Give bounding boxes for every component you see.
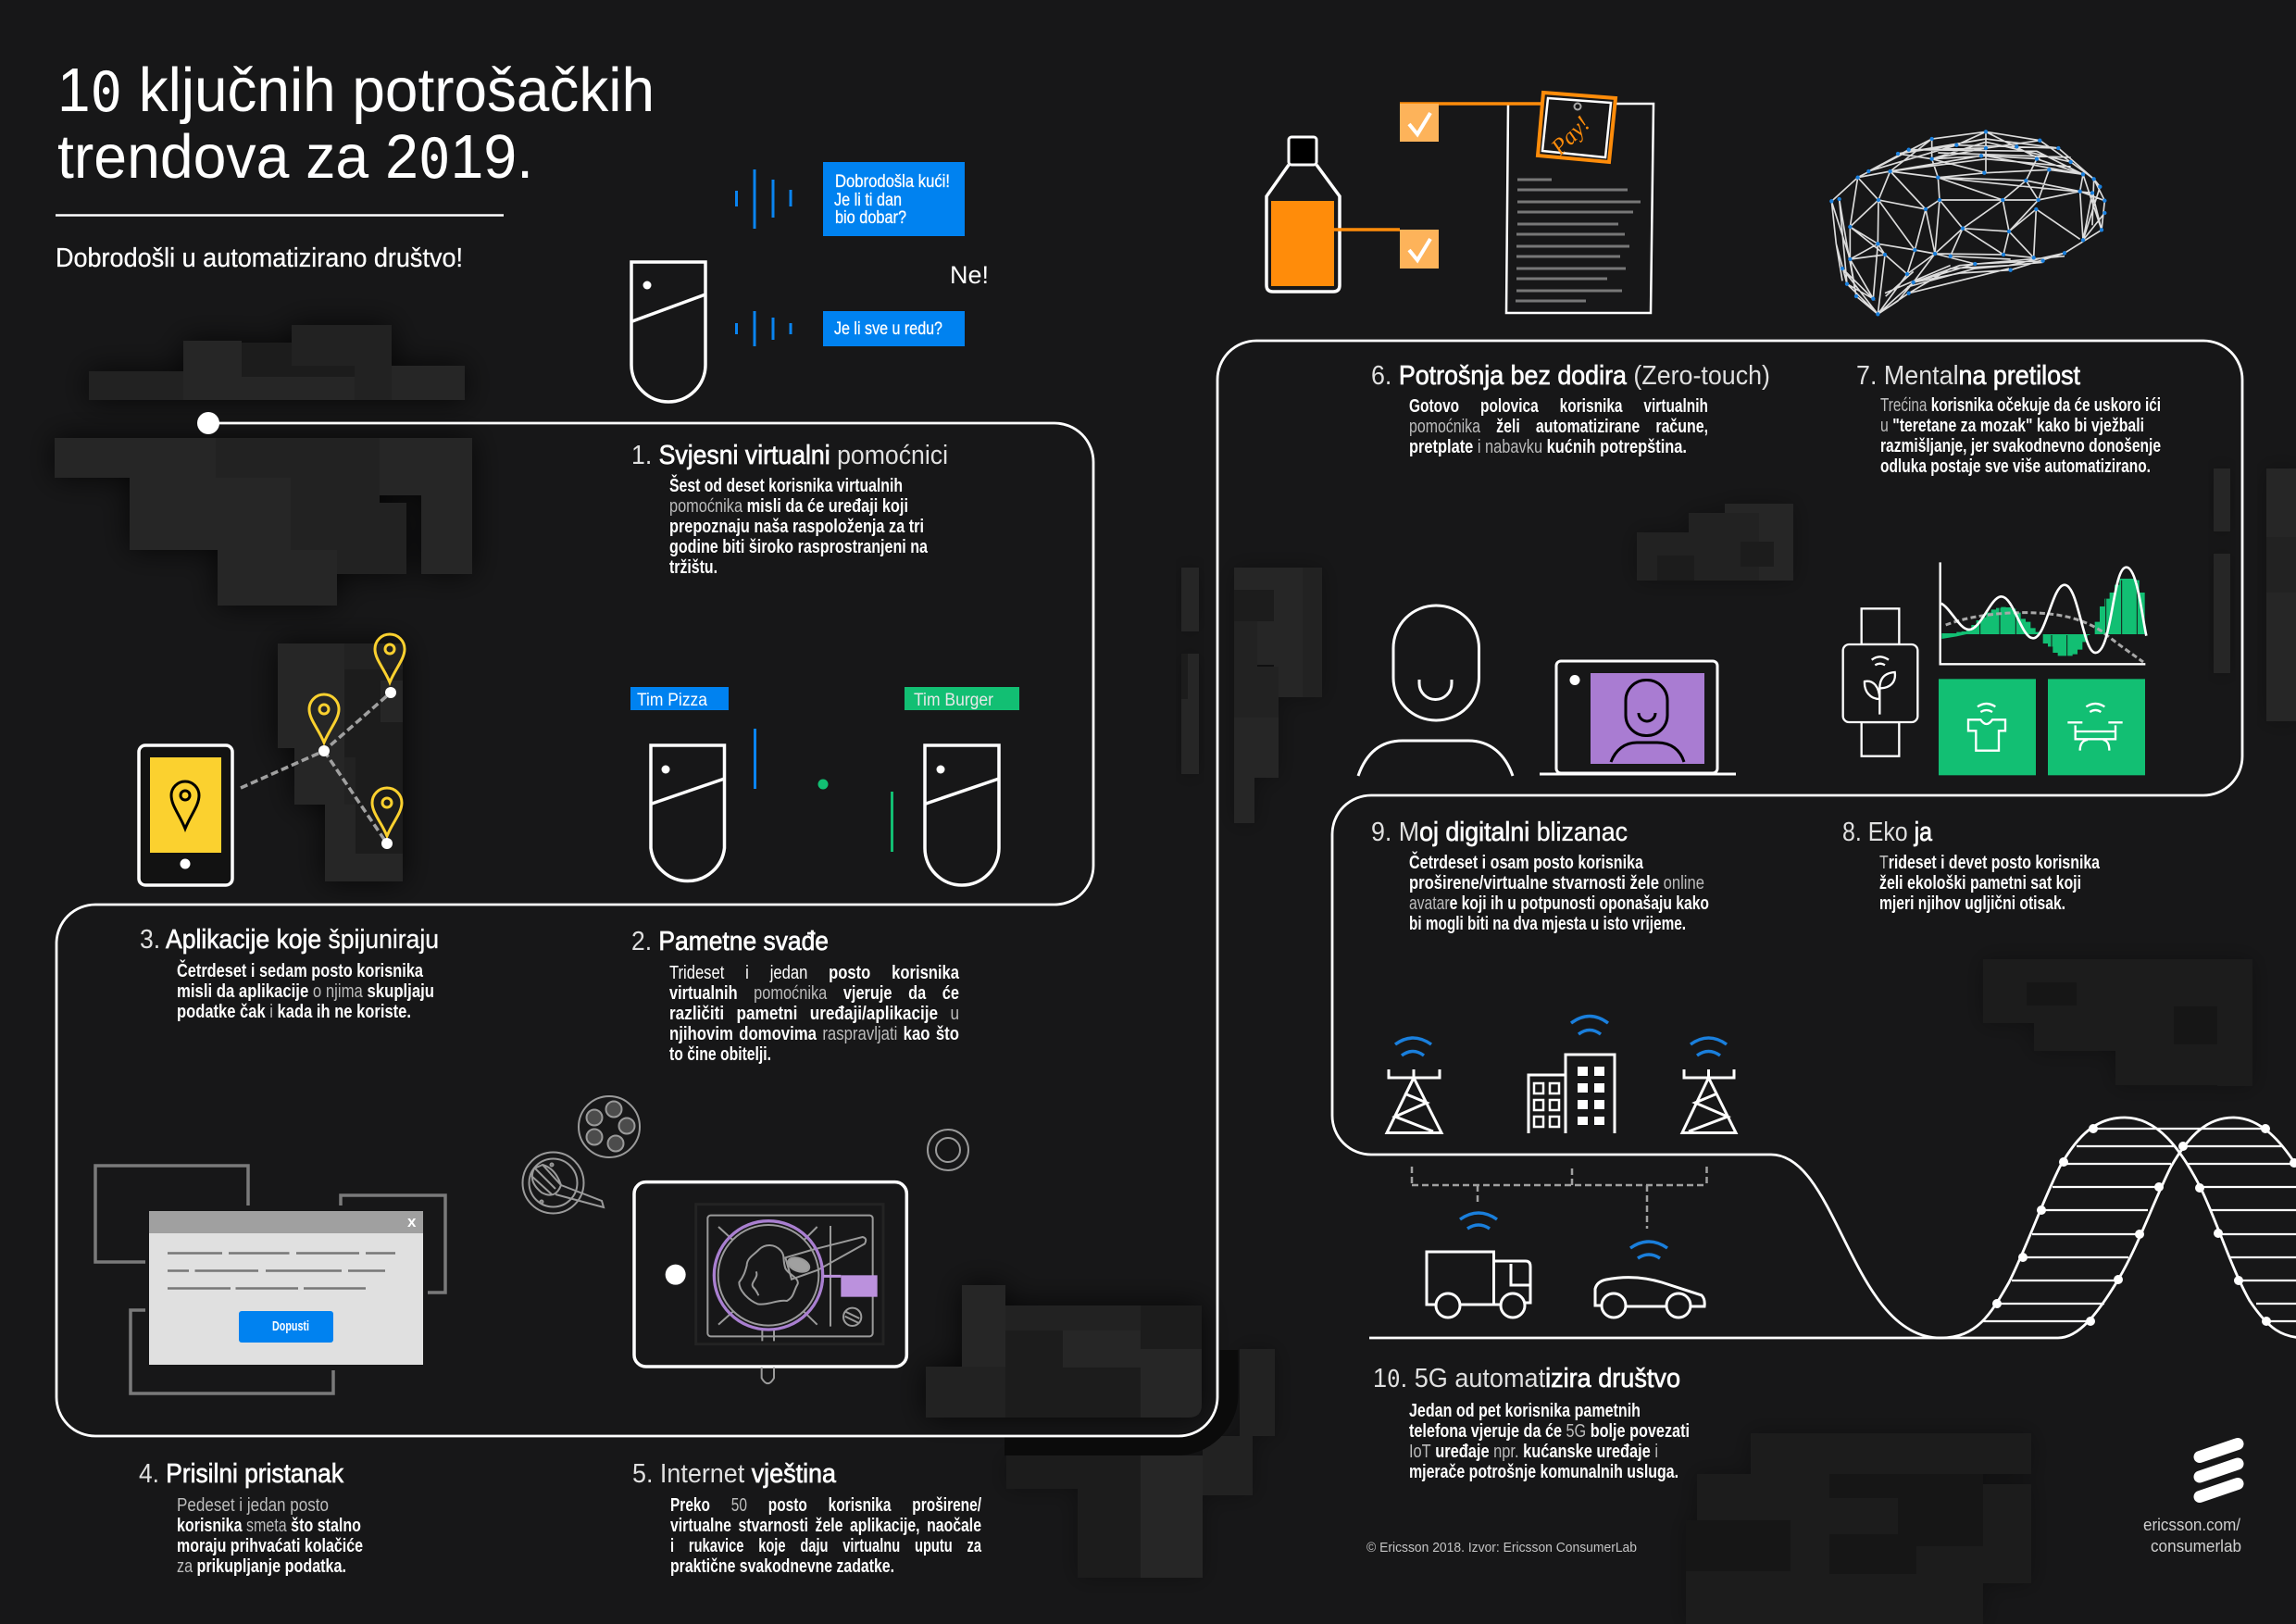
- body 2: Trideset i jedan posto korisnika: [669, 963, 960, 983]
- body 3: misli da aplikacije o njima skupljaju: [177, 981, 434, 1002]
- body 7: razmišljanje, jer svakodnevno donošenje: [1880, 436, 2161, 456]
- heading 4: 4. Prisilni pristanak: [139, 1459, 343, 1489]
- body 3: Četrdeset i sedam posto korisnika: [177, 959, 424, 981]
- body 2: njihovim domovima raspravljati kao što: [669, 1024, 959, 1044]
- heading 9: 9. Moj digitalni blizanac: [1371, 818, 1628, 847]
- body 9: avatare koji ih u potpunosti oponašaju kako: [1409, 893, 1709, 914]
- allow button: [239, 1311, 333, 1343]
- trend 9 text: [1371, 818, 1709, 934]
- heading 10: 10. 5G automatizira društvo: [1373, 1364, 1680, 1393]
- right speaker: [925, 745, 999, 885]
- body 9: Četrdeset i osam posto korisnika: [1409, 851, 1644, 873]
- body 7: Trećina korisnika očekuje da će uskoro ići: [1880, 395, 2161, 416]
- body 10: IoT uređaje npr. kućanske uređaje i: [1409, 1442, 1658, 1462]
- bottle: [1267, 137, 1340, 292]
- body 7: [1880, 395, 2161, 477]
- Ericsson logo: [2200, 1444, 2238, 1496]
- body 5: praktične svakodnevne zadatke.: [670, 1556, 894, 1577]
- bowl with whisk: [522, 1152, 604, 1213]
- chart axes: [1940, 562, 2145, 664]
- body 1: tržištu.: [669, 557, 718, 578]
- trend 3 text: [140, 925, 439, 1022]
- connected table tile: [2048, 679, 2145, 775]
- website: consumerlab: [2151, 1537, 2241, 1555]
- 5G wave illustration: [1369, 1118, 2296, 1338]
- title: 10 ključnih potrošačkih: [57, 56, 655, 125]
- connector lines: [1334, 104, 1544, 230]
- check box upper: [1400, 104, 1439, 142]
- cooking AR tablet illustration: [522, 1096, 968, 1383]
- nodes: [318, 687, 396, 849]
- pay note: Pay!: [1546, 111, 1595, 161]
- body 8: [1879, 853, 2101, 914]
- heading 5: 5. Internet vještina: [632, 1459, 837, 1489]
- heading 2: 2. Pametne svađe: [631, 927, 829, 956]
- body 5: i rukavice koje daju virtualnu uputu za: [670, 1536, 982, 1556]
- body 4: moraju prihvaćati kolačiće: [177, 1536, 363, 1556]
- pan highlight: [714, 1221, 823, 1330]
- person: [1358, 606, 1513, 776]
- chart bars: [1941, 607, 2040, 639]
- subtitle: Dobrodošli u automatizirano društvo!: [56, 244, 463, 273]
- zero-touch purchase illustration: [1267, 93, 1653, 313]
- building: [1529, 1055, 1615, 1133]
- body 2: to čine obitelji.: [669, 1044, 771, 1065]
- body 4: za prikupljanje podatka.: [177, 1556, 346, 1577]
- body 3: [177, 959, 434, 1022]
- smart arguments illustration: [630, 687, 1019, 885]
- left tower: [1387, 1069, 1441, 1133]
- Tim Burger label: Tim Burger: [914, 691, 994, 710]
- right tower: [1682, 1069, 1736, 1133]
- small dish: [928, 1130, 968, 1170]
- Tim Pizza label: Tim Pizza: [637, 691, 707, 710]
- speaker dialogue illustration: [631, 162, 989, 402]
- trend 4 text: [139, 1459, 363, 1577]
- website: ericsson.com/: [2143, 1516, 2240, 1534]
- body 3: podatke čak i kada ih ne koriste.: [177, 1002, 411, 1022]
- check box lower: [1400, 230, 1439, 269]
- dashed links: [241, 693, 391, 843]
- body 5: [670, 1495, 982, 1577]
- body 4: korisnika smeta što stalno: [177, 1516, 361, 1536]
- phone: [139, 745, 232, 885]
- question bubble 1: [823, 162, 965, 236]
- body 10: telefona vjeruje da će 5G bolje povezati: [1409, 1421, 1690, 1442]
- connected towers, building and vehicles illustration: [1387, 1017, 1736, 1318]
- start dot: [197, 412, 219, 434]
- laptop: [1540, 661, 1736, 774]
- title: [57, 56, 655, 192]
- body 2: različiti pametni uređaji/aplikacije u: [669, 1004, 959, 1024]
- copyright: © Ericsson 2018. Izvor: Ericsson ConsumerLab: [1366, 1541, 1637, 1555]
- heading 8: 8. Eko ja: [1842, 818, 1933, 847]
- trend 8 text: [1842, 818, 2101, 914]
- trend 10 text: [1373, 1364, 1690, 1482]
- dialog: x: [407, 1213, 417, 1230]
- body 2: virtualnih pomoćnika vjeruje da će: [669, 983, 959, 1004]
- left speaker: [651, 745, 724, 881]
- body 9: bi mogli biti na dva mjesta u isto vrijeme.: [1409, 914, 1686, 934]
- connecting panel outline: [56, 341, 2296, 1436]
- truck: [1427, 1252, 1530, 1318]
- bill document: [1506, 104, 1653, 313]
- smartwatch and carbon chart illustration: [1843, 562, 2146, 775]
- body 8: želi ekološki pametni sat koji: [1879, 873, 2081, 893]
- heading 3: 3. Aplikacije koje špijuniraju: [140, 925, 439, 955]
- dashed network lines: [1412, 1167, 1707, 1229]
- heading 1: 1. Svjesni virtualni pomoćnici: [631, 441, 948, 470]
- chart trend dashed: [1946, 613, 2143, 662]
- body 8: Trideset i devet posto korisnika: [1879, 853, 2101, 873]
- background window frames: [95, 1166, 445, 1393]
- question bubble 1: Je li ti dan: [834, 191, 902, 210]
- title: trendova za 2019.: [57, 122, 533, 192]
- body 7: u "teretane za mozak" kako bi vježbali: [1880, 416, 2144, 436]
- background block clusters: [55, 325, 2296, 1624]
- body 6: pretplate i nabavku kućnih potrepština.: [1409, 437, 1687, 457]
- body 10: [1409, 1401, 1690, 1482]
- body 9: [1409, 851, 1709, 934]
- trend 5 text: [632, 1459, 982, 1577]
- plate of food: [579, 1096, 640, 1157]
- body 9: proširene/virtualne stvarnosti žele online: [1409, 873, 1704, 893]
- heading 6: 6. Potrošnja bez dodira (Zero-touch): [1371, 361, 1770, 391]
- location pins: [309, 634, 405, 836]
- watch: [1843, 608, 1917, 756]
- allow button: Dopusti: [272, 1318, 309, 1334]
- cookie consent dialog illustration: [95, 1166, 445, 1393]
- speaker: [631, 262, 705, 402]
- body 1: prepoznaju naša raspoloženja za tri: [669, 517, 924, 537]
- trend 1 text: [631, 441, 948, 578]
- car: [1595, 1278, 1704, 1318]
- Tim Pizza label: [630, 687, 729, 710]
- dialog: [149, 1211, 423, 1365]
- trend 7 text: [1856, 361, 2161, 477]
- sound waves: [737, 169, 791, 346]
- person and laptop illustration: [1358, 606, 1736, 776]
- body 10: Jedan od pet korisnika pametnih: [1409, 1401, 1641, 1421]
- body 4: Pedeset i jedan posto: [177, 1495, 329, 1516]
- brain mesh illustration: [1831, 131, 2104, 314]
- body 7: odluka postaje sve više automatizirano.: [1880, 456, 2151, 477]
- stove: [707, 1216, 873, 1383]
- tablet: [634, 1182, 906, 1383]
- website: [2143, 1516, 2241, 1555]
- body 10: mjerače potrošnje komunalnih usluga.: [1409, 1462, 1678, 1482]
- question bubble 1: Dobrodošla kući!: [835, 172, 950, 192]
- body 6: Gotovo polovica korisnika virtualnih: [1409, 396, 1708, 417]
- body 6: [1409, 396, 1708, 457]
- body 1: pomoćnika misli da će uređaji koji: [669, 496, 908, 517]
- wifi signals: [1395, 1017, 1727, 1258]
- question bubble 2: Je li sve u redu?: [834, 319, 942, 339]
- body 1: [669, 474, 929, 578]
- pay note: [1538, 93, 1616, 162]
- trend 2 text: [631, 927, 960, 1065]
- connected shirt tile: [1939, 679, 2036, 775]
- question bubble 2: [823, 311, 965, 346]
- heading 7: 7. Mentalna pretilost: [1856, 361, 2080, 391]
- body 5: Preko 50 posto korisnika proširene/: [670, 1495, 981, 1516]
- body 4: [177, 1495, 363, 1577]
- answer: Ne!: [950, 261, 989, 289]
- body 5: virtualne stvarnosti žele aplikacije, naočale: [670, 1516, 981, 1536]
- body 1: Šest od deset korisnika virtualnih: [669, 474, 903, 496]
- location tracking illustration: [139, 634, 405, 885]
- body 6: pomoćnika želi automatizirane račune,: [1409, 417, 1708, 437]
- body 1: godine biti široko rasprostranjeni na: [669, 537, 929, 557]
- trend 6 text: [1371, 361, 1770, 457]
- body 2: [669, 963, 960, 1065]
- Tim Burger label: [905, 687, 1019, 710]
- chart curve: [1941, 568, 2146, 653]
- question bubble 1: bio dobar?: [835, 208, 906, 228]
- body 8: mjeri njihov ugljični otisak.: [1879, 893, 2065, 914]
